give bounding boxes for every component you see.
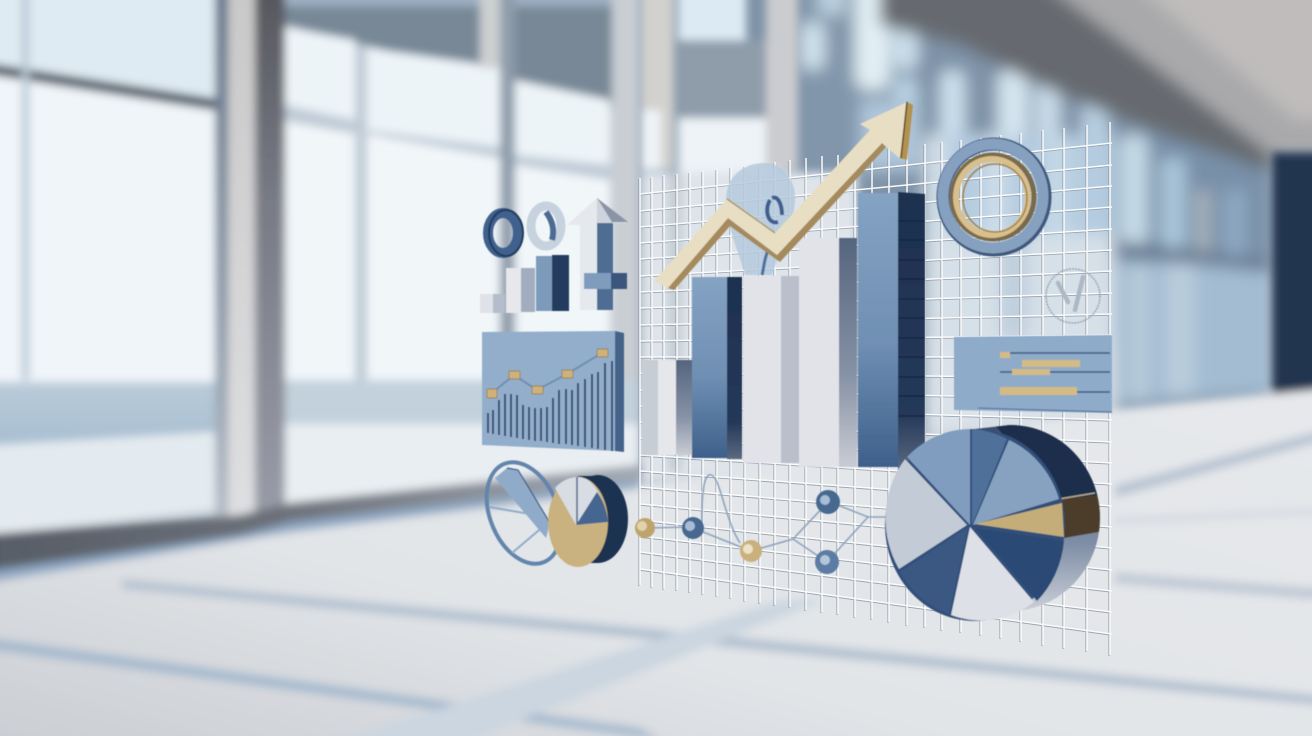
node: gold (635, 518, 655, 538)
bar 5 (858, 192, 925, 470)
node: blue (682, 517, 704, 539)
small pie chart (548, 475, 628, 567)
icon cluster: rings, mini bars and up arrow (480, 198, 628, 313)
mini bar chart (480, 255, 569, 313)
left windows (0, 0, 285, 535)
icon: blue and gold ring target (943, 144, 1045, 250)
icon: faint dial with check mark (1046, 269, 1100, 323)
large pie chart (885, 420, 1110, 622)
icon: dark ring (488, 210, 523, 256)
pie depth (976, 424, 1101, 610)
icon: rising gold arrow (654, 102, 913, 290)
line and bar chart panel (482, 331, 624, 452)
slices (907, 429, 970, 525)
node: gold (740, 540, 762, 562)
node: blue (816, 490, 840, 514)
floor shadows (122, 580, 1312, 706)
horizontal bar panel (954, 335, 1112, 413)
column bars (488, 361, 612, 451)
dark band under ceiling (880, 0, 1272, 172)
bar 3 (743, 276, 799, 463)
icon: light ring (531, 206, 561, 246)
node: blue (815, 550, 839, 574)
network line chart (635, 475, 886, 574)
bar 4 (799, 238, 857, 467)
corridor (620, 0, 1312, 480)
gold markers (487, 349, 608, 398)
track lines (1000, 353, 1110, 392)
connecting lines (645, 475, 886, 562)
bar chart (642, 192, 925, 470)
icon: up arrow with cross bar (567, 198, 628, 310)
end wall (1272, 152, 1312, 396)
blue shadow under sill (0, 480, 640, 584)
window sill (0, 465, 640, 572)
middle windows (285, 0, 640, 505)
near corridor columns (640, 0, 858, 482)
floor (0, 388, 1312, 736)
wire grid panel (639, 122, 1112, 656)
bar 2 (692, 277, 742, 459)
gold bars (1000, 352, 1080, 395)
ceiling (1040, 0, 1312, 155)
trend line (492, 353, 602, 393)
far windows (1115, 130, 1272, 262)
icon: wire pie ring (473, 451, 575, 575)
bar 1 (642, 360, 692, 455)
icon: ghost light bulb behind the arrow (726, 163, 795, 275)
